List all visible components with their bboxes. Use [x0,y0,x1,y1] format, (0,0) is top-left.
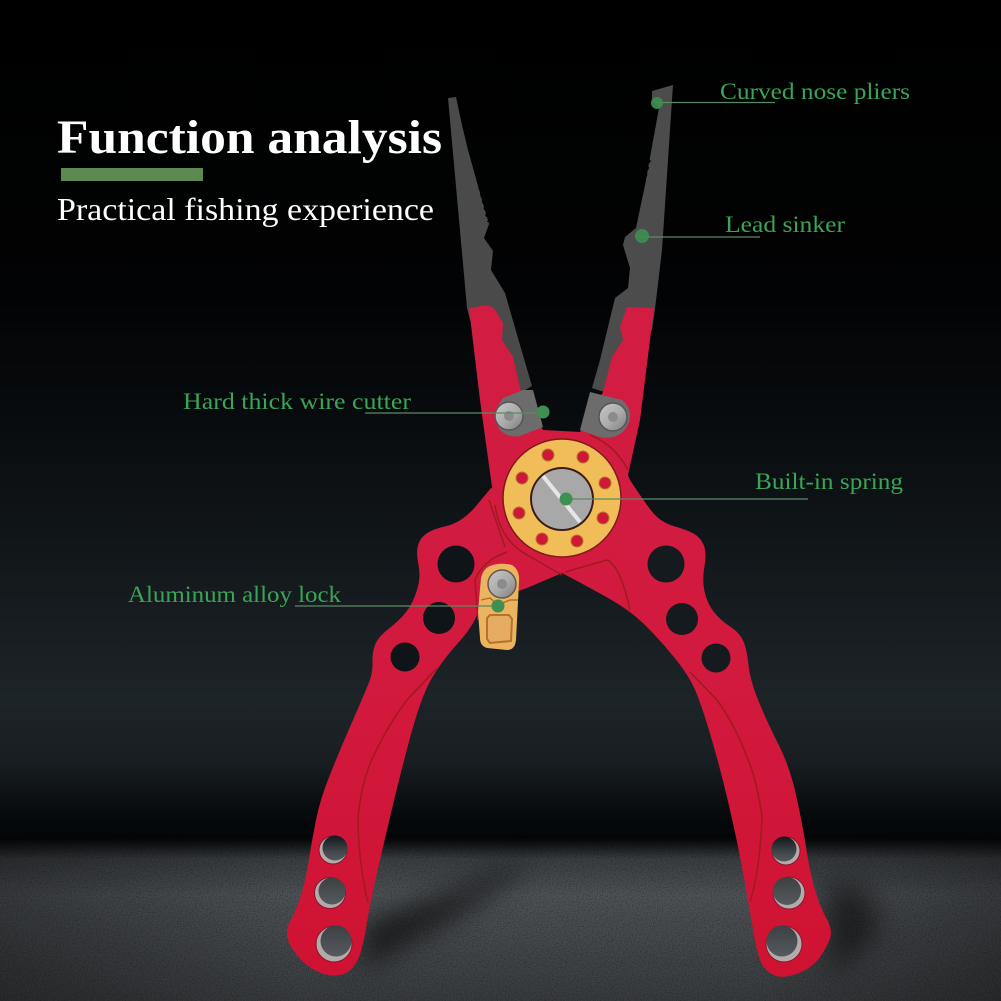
right handle and upper-left arm [469,306,831,977]
handle contour lines [358,435,762,903]
right jaw plate with screw [580,392,630,438]
left jaw plate with screw [495,390,543,436]
left handle and upper-right arm [287,307,654,976]
pliers [287,85,831,977]
callout: hard thick wire cutter [183,389,550,418]
left steel jaw [448,97,532,392]
title accent bar [61,168,203,181]
aluminum lock [478,564,519,650]
jaw serrations [463,126,650,224]
subtitle: Practical fishing experience [57,191,434,227]
lower holes left [314,836,352,962]
callout: curved nose pliers: Curved nose pliers [720,79,910,104]
callout: built-in spring: Built-in spring [755,469,904,494]
callout: lead sinker [635,212,845,243]
callout: aluminum alloy lock [128,582,504,612]
callout: lead sinker: Lead sinker [725,212,845,237]
floor shadows of the pliers [362,862,880,975]
callout: hard thick wire cutter: Hard thick wire cutter [183,389,411,414]
callout: aluminum alloy lock: Aluminum alloy lock [128,582,342,607]
callout: built-in spring [560,469,904,506]
grip holes left [390,546,474,672]
grip holes right [648,546,730,672]
built-in spring cap [530,467,594,531]
right steel jaw [592,85,673,392]
callout: curved nose pliers [651,79,910,109]
gold pivot ring [503,439,621,557]
lower holes right [766,836,805,962]
title: Function analysis [57,111,442,164]
